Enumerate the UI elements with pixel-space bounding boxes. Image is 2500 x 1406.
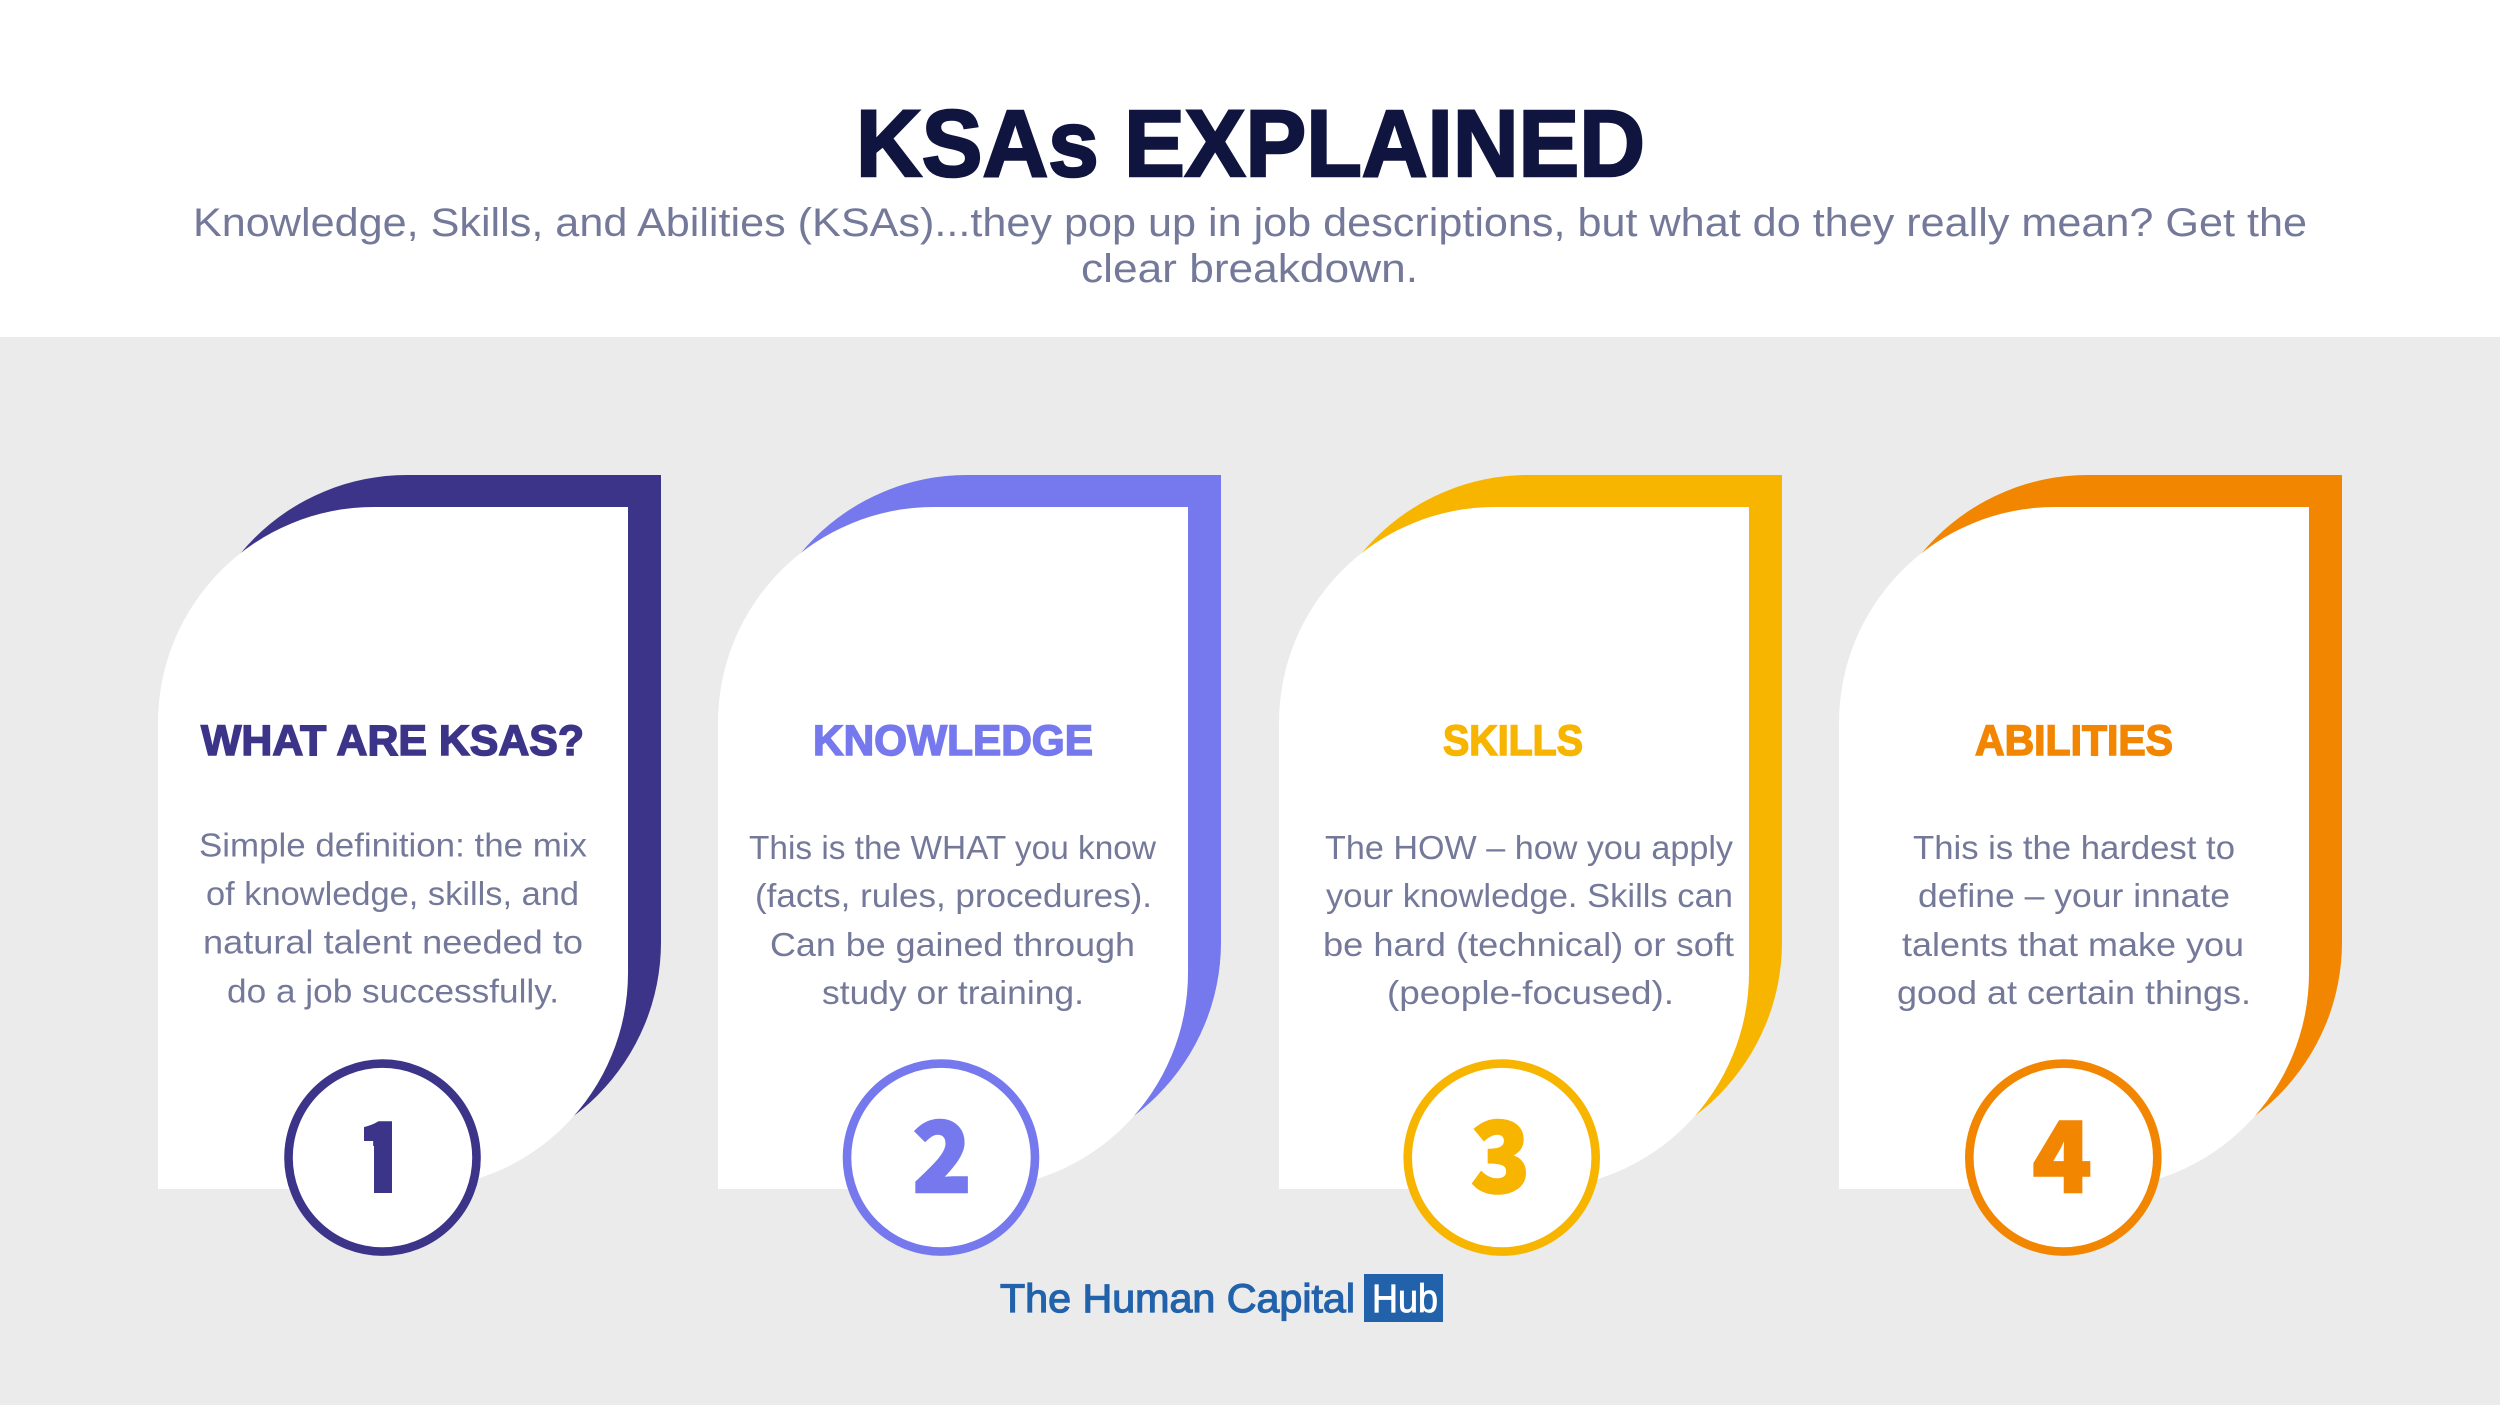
number badge 4: 4 — [2032, 1079, 2092, 1220]
logo: The Human Capital Hub: The Human Capital — [1000, 1277, 1355, 1321]
body text 3 — [1323, 829, 1734, 1011]
number badge 2: 2 — [912, 1079, 972, 1220]
panel: what are KSAs — [158, 475, 661, 1252]
body text 1: natural talent needed to — [203, 924, 583, 960]
body text 2: (facts, rules, procedures). — [755, 877, 1152, 914]
number badge 3: 3 — [1471, 1079, 1530, 1220]
number badge 1: 1 — [351, 1080, 411, 1221]
subtitle — [193, 201, 2307, 291]
card shape 3 — [1279, 475, 1782, 1189]
card shape 4 — [1839, 475, 2342, 1189]
body text 2: study or training. — [822, 974, 1084, 1011]
body text 4: talents that make you — [1902, 926, 2244, 963]
subtitle: clear breakdown. — [1081, 247, 1418, 291]
heading 3: SKILLS — [1443, 717, 1583, 765]
number badge 3 — [1408, 1064, 1596, 1252]
body text 3: be hard (technical) or soft — [1323, 926, 1734, 963]
body text 2: This is the WHAT you know — [749, 829, 1156, 866]
number badge 2 — [847, 1064, 1035, 1252]
heading 2: KNOWLEDGE — [813, 717, 1093, 765]
body text 3: your knowledge. Skills can — [1326, 877, 1733, 914]
body text 2 — [749, 829, 1156, 1011]
subtitle: Knowledge, Skills, and Abilities (KSAs)...they pop up in job descriptions, but what do they really mean? Get the — [193, 201, 2307, 245]
body text 4: This is the hardest to — [1913, 829, 2235, 866]
body text 1: do a job successfully. — [227, 972, 559, 1010]
number badge 4 — [1969, 1064, 2157, 1252]
number badge 1 — [288, 1064, 476, 1252]
panel: skills — [1279, 475, 1782, 1252]
body text 1: of knowledge, skills, and — [206, 875, 579, 912]
body text 3: The HOW – how you apply — [1325, 829, 1734, 866]
title: KSAs EXPLAINED — [856, 91, 1645, 197]
body text 3: (people-focused). — [1387, 974, 1674, 1011]
panel: knowledge — [718, 475, 1221, 1252]
heading 4: ABILITIES — [1975, 717, 2173, 765]
panel: abilities — [1839, 475, 2342, 1252]
body text 1 — [199, 826, 588, 1010]
card shape 1 — [158, 475, 661, 1189]
body text 1: Simple definition: the mix — [199, 826, 588, 864]
body text 4 — [1897, 829, 2251, 1011]
logo: The Human Capital Hub: Hub — [1372, 1277, 1438, 1321]
heading 1: WHAT ARE KSAS? — [201, 717, 584, 765]
body text 4: define – your innate — [1918, 877, 2230, 914]
body text 4: good at certain things. — [1897, 974, 2251, 1011]
card shape 2 — [718, 475, 1221, 1189]
body text 2: Can be gained through — [770, 926, 1135, 963]
